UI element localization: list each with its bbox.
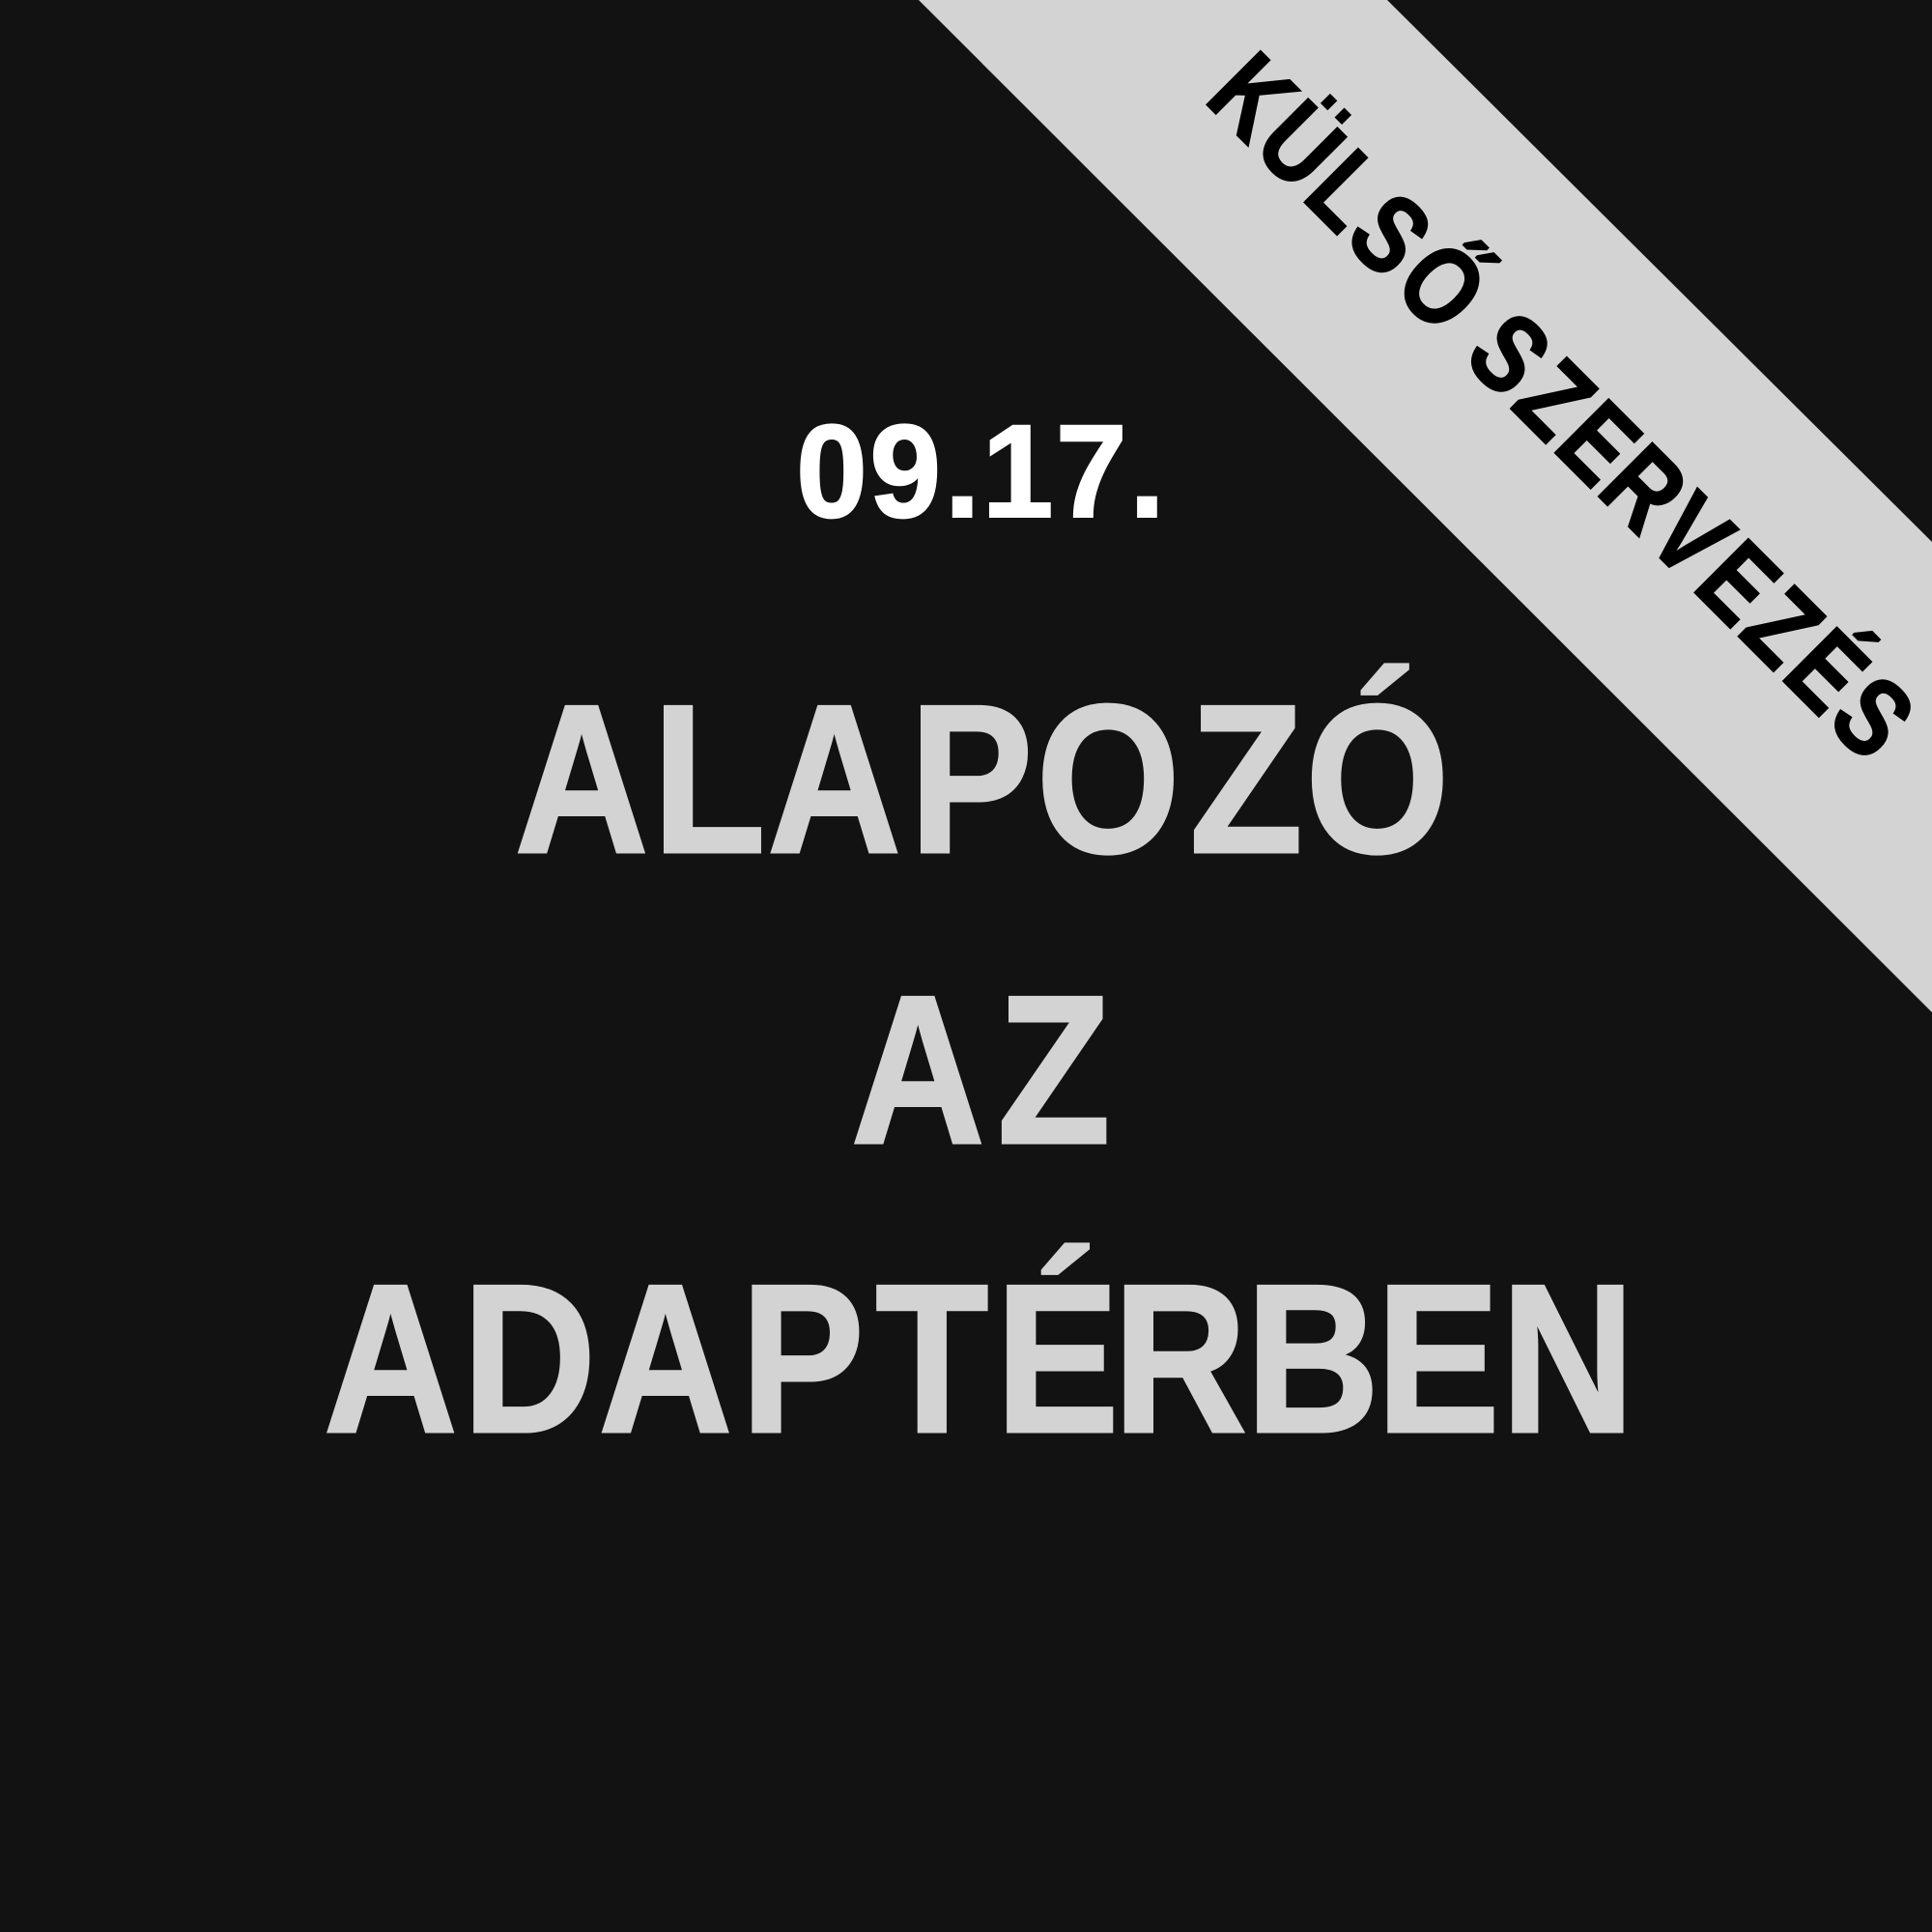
title (324, 661, 1634, 1477)
title line 3: ADAPTÉRBEN (324, 1240, 1634, 1477)
title line 2: AZ (851, 952, 1111, 1188)
banner band (919, 0, 1932, 1012)
title line 1: ALAPOZÓ (515, 661, 1449, 897)
date: 09.17. (796, 397, 1165, 545)
banner text: KÜLSŐ SZERVEZÉS (1185, 31, 1932, 782)
diagonal corner banner (919, 0, 1932, 1012)
